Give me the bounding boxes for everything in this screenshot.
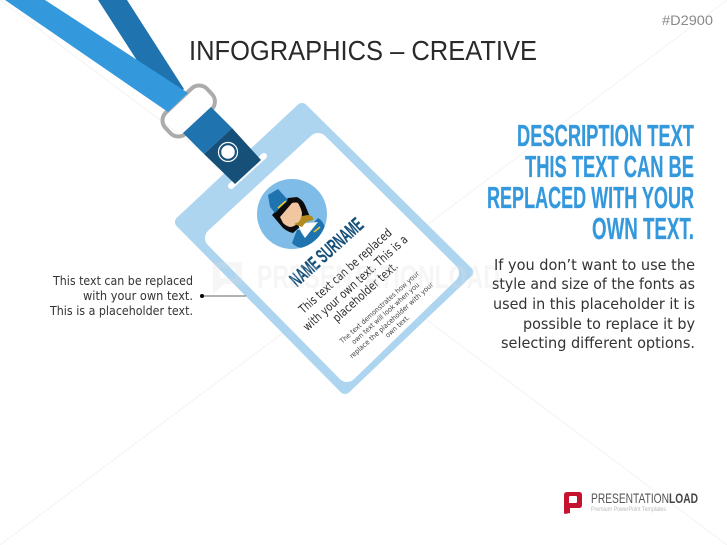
logo: [564, 490, 698, 514]
card paragraph: [295, 226, 411, 334]
card slot: [231, 156, 264, 186]
watermark: [213, 259, 500, 295]
name heading: NAME SURNAME: [286, 214, 368, 291]
avatar background: [257, 179, 327, 249]
hair: [272, 197, 310, 233]
lanyard dark strap: [98, 0, 184, 100]
description body: selecting different options.: [501, 334, 695, 352]
callout text: This is a placeholder text.: [49, 304, 193, 318]
shoulder stripe: [314, 227, 320, 232]
callout leader line: [200, 294, 246, 298]
card inner panel: [215, 143, 449, 372]
reference code: #D2900: [662, 12, 713, 28]
callout text: This text can be replaced: [52, 274, 193, 288]
hat: [268, 189, 288, 213]
logo icon: [564, 492, 582, 514]
card small print: own text will look when you: [350, 281, 421, 346]
logo wordmark: PRESENTATIONLOAD: [591, 490, 698, 506]
callout: left note: [49, 274, 246, 318]
card small print: replace the placeholder with your: [348, 281, 435, 360]
card paragraph: with your own text. This is a: [300, 232, 411, 334]
callout text: [49, 274, 193, 318]
card frame: [181, 109, 467, 388]
description body: used in this placeholder it is: [493, 295, 695, 313]
hat stripe: [278, 201, 286, 208]
description body: style and size of the fonts as: [492, 275, 695, 293]
description heading: [487, 118, 694, 246]
watermark: PRESENTATIONLOAD: [257, 259, 500, 295]
face: [280, 202, 302, 227]
lanyard: [5, 0, 219, 141]
clip blue strap: [183, 107, 232, 154]
card small print: The text demonstrates how your: [338, 270, 421, 346]
callout text: with your own text.: [83, 289, 193, 303]
collar: [298, 222, 318, 238]
uniform: [292, 218, 325, 248]
lanyard light strap: [5, 0, 188, 112]
description body: possible to replace it by: [523, 315, 695, 333]
avatar: flight attendant: [257, 179, 327, 249]
metal ring: [158, 81, 219, 141]
title: INFOGRAPHICS – CREATIVE: [189, 35, 537, 66]
description body: [492, 256, 695, 352]
card small print: own text.: [384, 314, 411, 340]
card paragraph: placeholder text.: [330, 259, 401, 325]
card paragraph: This text can be replaced: [295, 226, 395, 317]
logo tagline: Premium PowerPoint Templates: [591, 506, 667, 513]
clip button: [218, 142, 238, 162]
ID card: [181, 107, 467, 388]
scarf: [294, 215, 313, 227]
clip: [183, 107, 261, 184]
clip dark base: [204, 128, 261, 184]
description body: If you don’t want to use the: [494, 256, 695, 274]
